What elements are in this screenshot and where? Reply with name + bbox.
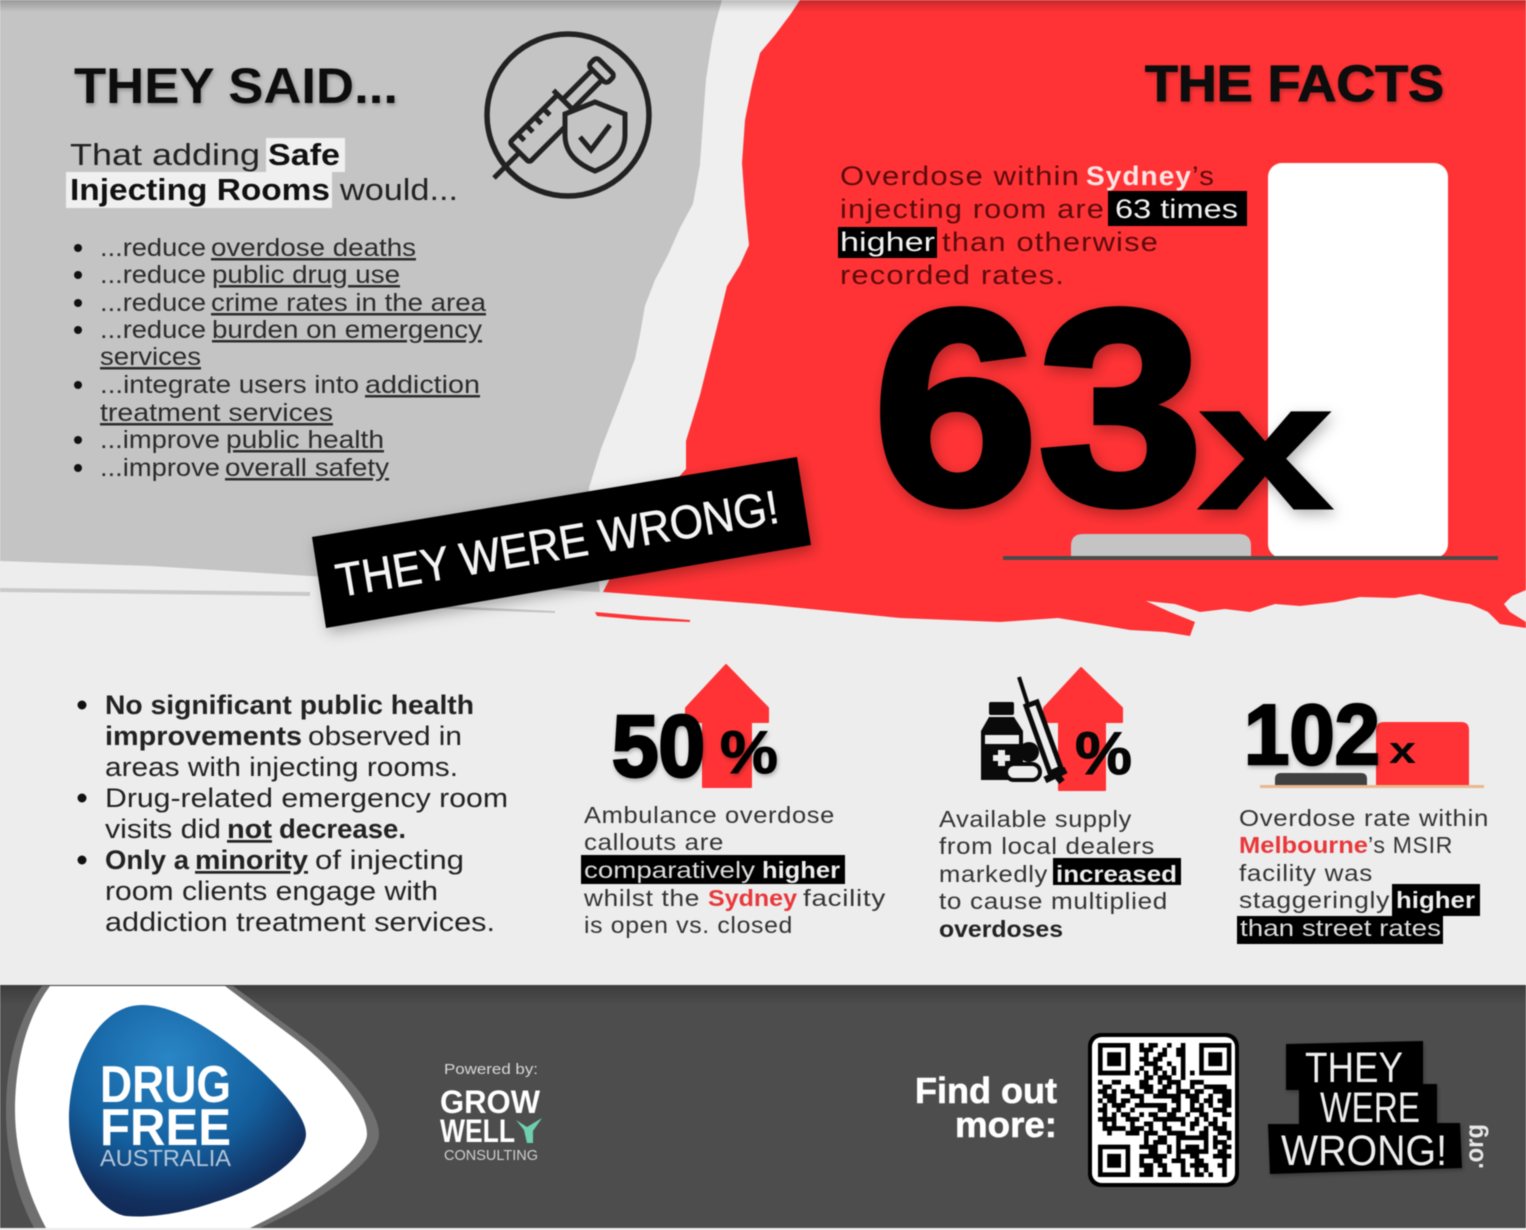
stat value: 50 [612, 698, 705, 795]
description: higher [762, 857, 840, 883]
text block: intro sentence: Injecting Rooms [70, 172, 330, 207]
text block: Sydney overdose statement: than otherwise [942, 227, 1159, 257]
description: facility was [1239, 860, 1373, 886]
list: claims: ...reduce [100, 234, 206, 262]
big number: 63x: x [1199, 346, 1332, 547]
logo: Grow Well Consulting [440, 1061, 542, 1164]
call to action: find out more: more: [955, 1104, 1057, 1145]
list: claims: ...improve [100, 426, 220, 454]
description [581, 802, 886, 938]
list: claims: ...reduce [100, 289, 206, 317]
description: facility [803, 885, 886, 911]
description: Available supply [939, 806, 1132, 832]
description: overdoses [939, 916, 1063, 942]
description: comparatively [584, 857, 756, 883]
text block: intro sentence: That adding [70, 137, 260, 172]
panel: the facts background [603, 0, 1526, 636]
big number: 63x [873, 252, 1332, 562]
logo: Drug Free Australia: FREE [100, 1099, 231, 1157]
chart: 63 times bar comparison [1003, 163, 1498, 560]
description: ’s MSIR [1368, 832, 1453, 858]
logo: Drug Free Australia [6, 986, 379, 1228]
list: findings: minority [195, 845, 308, 875]
text block: Sydney overdose statement [838, 161, 1247, 290]
heading: the facts: THE FACTS [1145, 55, 1444, 112]
footer bar [0, 985, 1526, 1228]
text block: intro sentence: Safe [268, 137, 340, 172]
panel: they said background [0, 0, 722, 592]
logo: Grow Well Consulting: Powered by: [444, 1061, 538, 1078]
stat unit: x [1389, 730, 1416, 772]
logo: Drug Free Australia: AUSTRALIA [100, 1145, 232, 1171]
big number: 63x: 63 [873, 252, 1203, 562]
list: findings: areas with injecting rooms. [105, 752, 458, 782]
text block: intro sentence: would... [339, 172, 458, 207]
list: findings: not [227, 814, 272, 844]
list: claims [74, 234, 486, 482]
list: claims: public drug use [212, 261, 400, 289]
description: to cause multiplied [939, 888, 1168, 914]
list: findings [78, 690, 508, 937]
description: staggeringly [1239, 887, 1390, 913]
text block: Sydney overdose statement: 63 times [1115, 194, 1238, 224]
description: whilst the [583, 885, 700, 911]
icon: medicine bottle, syringe and pills [981, 677, 1066, 782]
logo: They Were Wrong .org: THEY [1305, 1044, 1403, 1092]
list: findings: Only a [105, 845, 190, 875]
logo: Grow Well Consulting: CONSULTING [444, 1147, 538, 1164]
description: than street rates [1240, 915, 1441, 941]
description: Sydney [708, 885, 797, 911]
description: Melbourne [1239, 832, 1368, 858]
stat value [612, 698, 778, 795]
text block: Sydney overdose statement: ’s [1192, 161, 1215, 191]
description: higher [1396, 887, 1475, 913]
text block: Sydney overdose statement: recorded rates. [840, 260, 1065, 290]
top shadow [0, 0, 1526, 12]
logo: They Were Wrong .org: .org [1459, 1124, 1489, 1169]
list: claims: treatment services [100, 399, 333, 427]
call to action: find out more: Find out [915, 1070, 1057, 1111]
logo: Grow Well Consulting: GROW [440, 1084, 541, 1120]
text block: Sydney overdose statement: Overdose within [840, 161, 1080, 191]
footer top shadow [0, 985, 1526, 1005]
list: findings: visits did [105, 814, 221, 844]
list: claims: services [100, 343, 201, 371]
stat: 50 percent ambulance callouts [581, 665, 886, 938]
logo: They Were Wrong .org: WRONG! [1281, 1127, 1447, 1175]
list: findings: observed in [308, 721, 462, 751]
heading: they said: THEY SAID... [74, 58, 398, 114]
list: findings: improvements [105, 721, 302, 751]
list: claims: ...reduce [100, 261, 206, 289]
list: claims: addiction [365, 371, 480, 399]
list: findings: room clients engage with [105, 876, 438, 906]
list: claims: ...integrate users into [100, 371, 359, 399]
icon: red up arrow [1044, 668, 1122, 790]
description: is open vs. closed [584, 912, 793, 938]
stat: dealer supply increase [939, 668, 1181, 942]
stat: 102x Melbourne [1237, 688, 1489, 944]
icon: syringe and shield prohibited [480, 34, 649, 196]
list: findings: of injecting [315, 845, 464, 875]
list: findings: addiction treatment services. [105, 907, 495, 937]
description: Overdose rate within [1239, 805, 1489, 831]
stat value: % [1075, 720, 1132, 787]
description [939, 806, 1181, 942]
list: claims: overall safety [225, 454, 390, 482]
description: from local dealers [939, 833, 1155, 859]
list: claims: burden on emergency [212, 316, 483, 344]
description: increased [1056, 861, 1177, 887]
list: claims: ...improve [100, 454, 220, 482]
list: claims: ...reduce [100, 316, 206, 344]
logo: They Were Wrong .org [1268, 1041, 1489, 1175]
list: findings: Drug-related emergency room [105, 783, 508, 813]
list: claims: crime rates in the area [211, 289, 486, 317]
logo: They Were Wrong .org: WERE [1320, 1084, 1420, 1132]
text block: intro sentence [66, 137, 458, 208]
bottom page edge [0, 1228, 1526, 1230]
stat value: 102 [1244, 688, 1380, 783]
text block: Sydney overdose statement: higher [840, 227, 935, 257]
description: Ambulance overdose [584, 802, 835, 828]
chart: 102 times bars [1260, 722, 1484, 788]
torn paper strip [589, 0, 800, 592]
text block: Sydney overdose statement: Sydney [1086, 161, 1192, 191]
description: markedly [939, 861, 1048, 887]
description [1237, 805, 1489, 944]
stat value: % [720, 719, 778, 786]
logo: Grow Well Consulting: WELL [440, 1113, 515, 1149]
text block: Sydney overdose statement: injecting room are [840, 194, 1105, 224]
description: callouts are [584, 829, 724, 855]
torn edge marks [0, 588, 690, 622]
logo: Drug Free Australia: DRUG [100, 1056, 231, 1114]
list: findings: No significant public health [105, 690, 474, 720]
list: claims: overdose deaths [211, 234, 416, 262]
QR code [1088, 1033, 1239, 1187]
list: claims: public health [226, 426, 384, 454]
icon: red up arrow [686, 665, 768, 787]
call to action: find out more [915, 1070, 1057, 1145]
list: findings: decrease. [279, 814, 406, 844]
banner: they were wrong: THEY WERE WRONG! [332, 480, 782, 607]
